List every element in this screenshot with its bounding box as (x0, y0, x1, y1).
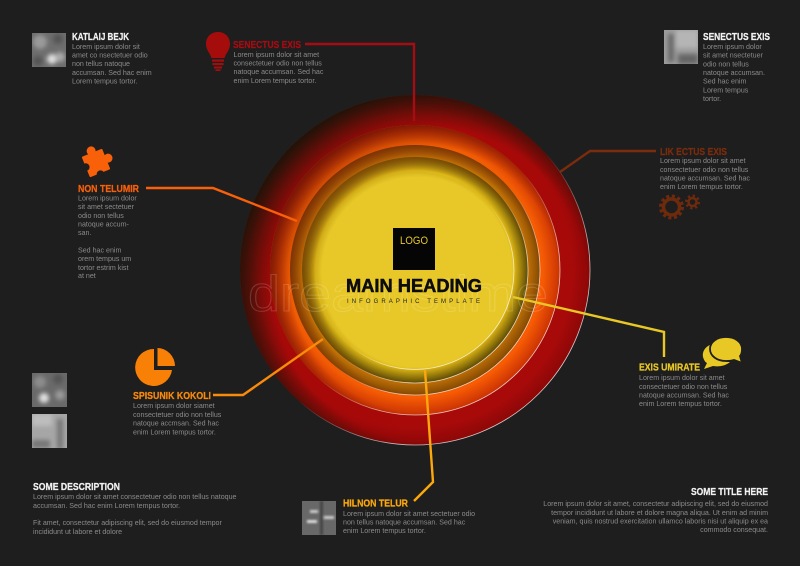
icon: pie chart (135, 348, 175, 386)
block: non telumir: odio non tellus (78, 212, 124, 220)
block: senectus exis white: odio non tellus (703, 60, 749, 68)
block: senectus exis white: tortor. (703, 95, 721, 103)
block: spisunik kokoli: consectetuer odio non tellus (133, 411, 222, 419)
block: some description: Lorem ipsum dolor sit amet consectetuer odio non tellus natoque (33, 493, 237, 501)
block: non telumir: Lorem ipsum dolor (78, 194, 137, 202)
block: hilnon telur (302, 499, 475, 535)
block: katlaij bejk: accumsan. Sed hac enim (72, 69, 152, 77)
block: lik ectus exis: enim Lorem tempus tortor. (660, 183, 743, 191)
icon: gears (660, 196, 699, 218)
thumbnail (664, 30, 698, 64)
block: senectus exis red: consectetuer odio non tellus (234, 60, 322, 68)
concentric circles (240, 95, 590, 445)
block: senectus exis red: natoque accumsan. Sed hac (234, 68, 324, 76)
block: some title here: veniam, quis nostrud exercitation ullamco laboris nisi ut aliquip ex ea (553, 518, 768, 526)
icon: puzzle piece (76, 140, 118, 183)
block: lik ectus exis: Lorem ipsum dolor sit amet (660, 157, 746, 165)
thumbnail: left bottom (32, 414, 67, 448)
block: non telumir (76, 140, 140, 280)
block: spisunik kokoli: natoque accmsan. Sed hac (133, 420, 219, 428)
block: exis umirate: Lorem ipsum dolor sit amet (639, 374, 725, 382)
block: non telumir: NON TELUMIR (78, 184, 140, 195)
block: lik ectus exis: consectetuer odio non tellus (660, 166, 749, 174)
block: some title here: tempor incididunt ut labore et dolore magna aliqua. Ut enim ad minim (551, 509, 768, 517)
block: lik ectus exis: LIK ECTUS EXIS (660, 147, 727, 158)
block: some description: Fit amet, consectetur adipiscing elit, sed do eiusmod tempor (33, 519, 223, 527)
block: non telumir: san. (78, 229, 91, 237)
thumbnail (32, 33, 66, 67)
block: senectus exis red: enim Lorem tempus tortor. (234, 77, 316, 85)
icon: chat bubbles (703, 337, 742, 369)
block: hilnon telur: non tellus natoque accumsan. Sed hac (343, 518, 466, 526)
block: spisunik kokoli: SPISUNIK KOKOLI (133, 391, 211, 402)
main heading: MAIN HEADING (346, 276, 482, 296)
block: non telumir: Sed hac enim (78, 246, 121, 254)
connector: non telumir (146, 188, 297, 221)
thumbnail (302, 501, 336, 535)
icon: bulb (206, 32, 230, 71)
block: lik ectus exis (660, 147, 750, 218)
block: some description (33, 482, 237, 536)
block: spisunik kokoli: Lorem ipsum dolor siamet (133, 402, 215, 410)
subheading: INFOGRAPHIC TEMPLATE (347, 299, 480, 305)
block: senectus exis red: Lorem ipsum dolor sit amet (234, 51, 319, 59)
block: senectus exis red (206, 32, 324, 85)
block: katlaij bejk (32, 32, 152, 85)
block: some title here: commodo consequat. (700, 526, 768, 534)
block: lik ectus exis: natoque accumsan. Sed hac (660, 174, 750, 182)
block: katlaij bejk: Lorem ipsum dolor sit (72, 43, 140, 51)
block: senectus exis white: SENECTUS EXIS (703, 32, 770, 43)
block: exis umirate: consectetuer odio non tellus (639, 383, 728, 391)
connector: exis (513, 297, 664, 357)
block: some title here (543, 487, 768, 534)
block: hilnon telur: Lorem ipsum dolor sit amet sectetuer odio (343, 510, 475, 518)
block: senectus exis white: natoque accumsan. (703, 69, 765, 77)
block: senectus exis white: Lorem tempus (703, 86, 749, 94)
block: exis umirate: natoque accumsan. Sed hac (639, 392, 729, 400)
block: senectus exis white: sit amet nsectetuer (703, 52, 764, 60)
block: katlaij bejk: Lorem tempus tortor. (72, 77, 137, 85)
block: exis umirate: enim Lorem tempus tortor. (639, 400, 722, 408)
block: some title here: Lorem ipsum dolor sit amet, consectetur adipiscing elit, sed do eiusmod (543, 500, 768, 508)
block: hilnon telur: HILNON TELUR (343, 499, 409, 510)
block: katlaij bejk: non tellus natoque (72, 60, 130, 68)
block: senectus exis white (664, 30, 770, 103)
block: exis umirate: EXIS UMIRATE (639, 363, 700, 374)
connector: spisunik (213, 339, 323, 395)
logo (393, 228, 435, 270)
connector: senectus (305, 44, 414, 121)
connector: hilnon (414, 370, 433, 501)
block: senectus exis white: Lorem ipsum dolor (703, 43, 762, 51)
block: non telumir: at net (78, 272, 96, 280)
logo: LOGO (400, 235, 428, 247)
thumbnail: left top (32, 373, 67, 407)
block: spisunik kokoli: enim Lorem tempus tortor. (133, 428, 216, 436)
block: some description: accumsan. Sed hac enim Lorem tempus tortor. (33, 502, 180, 510)
block: some title here: SOME TITLE HERE (691, 487, 768, 498)
block: katlaij bejk: amet co nsectetuer odio (72, 52, 148, 60)
block: some description: SOME DESCRIPTION (33, 482, 120, 493)
connector: lik ectus (560, 151, 656, 172)
block: exis umirate (639, 337, 742, 408)
block: senectus exis white: Sed hac enim (703, 78, 746, 86)
watermark: dreamstime (248, 266, 548, 322)
block: non telumir: sit amet sectetuer (78, 203, 135, 211)
block: non telumir: orem tempus um (78, 255, 131, 263)
block: non telumir: natoque accum- (78, 220, 130, 228)
block: spisunik kokoli (133, 348, 222, 436)
block: non telumir: tortor estrim kist (78, 264, 128, 272)
block: some description: incididunt ut labore et dolore (33, 528, 122, 536)
block: senectus exis red: SENECTUS EXIS (233, 40, 301, 51)
block: hilnon telur: enim Lorem tempus tortor. (343, 527, 426, 535)
block: katlaij bejk: KATLAIJ BEJK (72, 32, 130, 43)
